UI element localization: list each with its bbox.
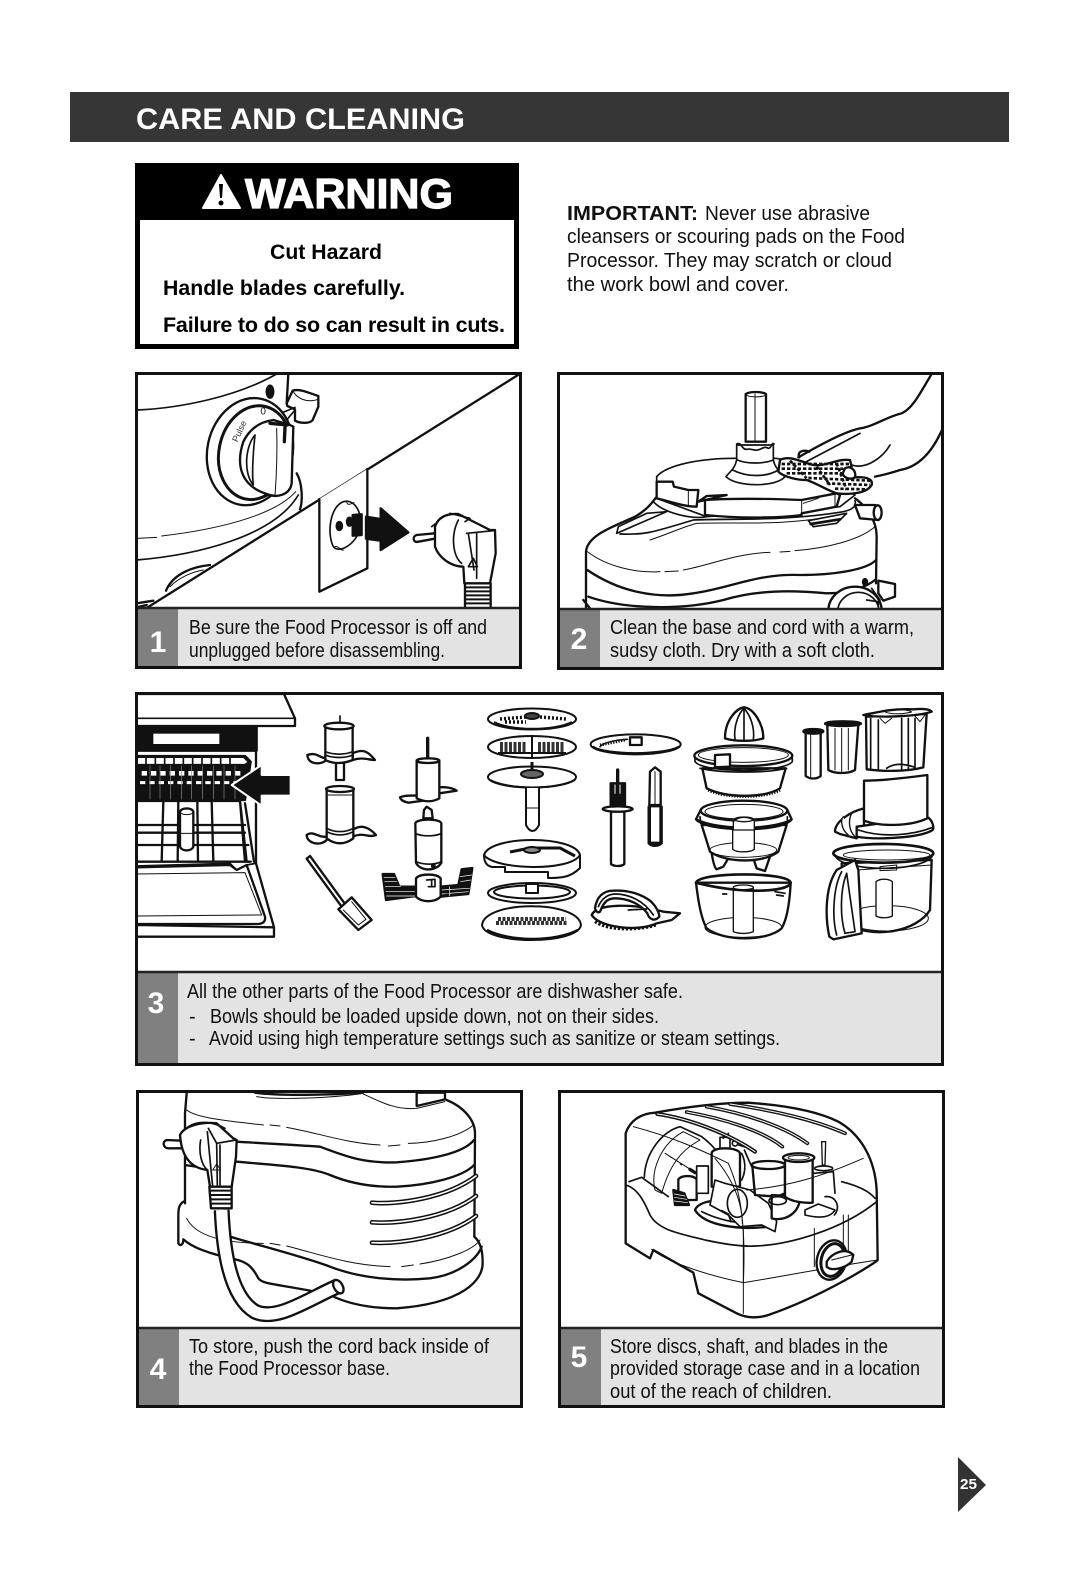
hazard name: Cut Hazard <box>270 240 382 264</box>
caption: step 1 <box>136 608 521 668</box>
important note: Processor. They may scratch or cloud <box>567 249 892 272</box>
caption: step 4 <box>136 1328 523 1406</box>
illustration: storage case <box>626 1103 878 1317</box>
illustration: citrus press bowls <box>694 707 792 938</box>
header bar <box>70 92 1009 142</box>
caption: step 3: Avoid using high temperature settings such as sanitize or steam settings. <box>209 1028 780 1050</box>
caption: step 3: All the other parts of the Food Processor are dishwasher safe. <box>187 981 683 1003</box>
caption: step 3 <box>136 972 943 1064</box>
caption: step 5: provided storage case and in a location <box>610 1358 920 1380</box>
caption: step 2: Clean the base and cord with a warm, <box>610 617 914 639</box>
page number marker <box>958 1457 986 1512</box>
illustration: storing the cord <box>164 1093 483 1314</box>
caption: step 1: 1 <box>150 626 166 659</box>
caption: step 4: the Food Processor base. <box>189 1358 390 1380</box>
illustration: food pushers, feed tube lid and work bowl <box>803 709 933 939</box>
caption: step 5 <box>558 1328 945 1406</box>
instruction: Handle blades carefully. <box>163 276 405 300</box>
icon: warning triangle <box>203 175 240 208</box>
illustration: unplug the processor: 0 <box>260 406 266 417</box>
illustration: disc, pushers and lid handle <box>591 734 681 929</box>
consequence: Failure to do so can result in cuts. <box>163 313 505 337</box>
panel: step 5 <box>558 1092 945 1406</box>
caption: step 2: sudsy cloth. Dry with a soft cloth. <box>610 640 875 662</box>
caption: step 1: Be sure the Food Processor is off and <box>189 617 487 639</box>
important note: cleansers or scouring pads on the Food <box>567 225 905 248</box>
important note: the work bowl and cover. <box>567 273 789 296</box>
illustration: wiping the base with a cloth <box>582 375 941 608</box>
important note: Never use abrasive <box>705 202 870 225</box>
caption: step 5: Store discs, shaft, and blades in the <box>610 1336 888 1358</box>
caption: step 3: Bowls should be loaded upside down, not on their sides. <box>210 1006 659 1028</box>
caption: step 3: - <box>189 1006 196 1028</box>
illustration: unplug the processor: Pulse <box>230 419 249 444</box>
caption: step 1: unplugged before disassembling. <box>189 640 445 662</box>
caption: step 5: 5 <box>571 1341 587 1374</box>
caption: step 3: - <box>189 1028 196 1050</box>
caption: step 5: out of the reach of children. <box>610 1381 832 1403</box>
panel: step 2 <box>557 373 943 668</box>
page number marker: 25 <box>960 1476 977 1493</box>
panel: step 3 <box>136 694 943 1064</box>
caption: step 4: 4 <box>150 1353 167 1386</box>
illustration: blades, spatula and dough tool <box>307 716 472 930</box>
illustration: unplug the processor <box>137 373 522 609</box>
title: CARE AND CLEANING <box>136 103 465 136</box>
important note <box>567 202 905 296</box>
warning box <box>135 163 519 346</box>
caption: step 2 <box>557 609 943 668</box>
panel: step 4 <box>136 1092 523 1406</box>
caption: step 4: To store, push the cord back inside of <box>189 1336 489 1358</box>
caption: step 3: 3 <box>148 987 164 1020</box>
important note: IMPORTANT: <box>567 202 698 225</box>
illustration: open dishwasher <box>137 694 295 937</box>
caption: step 2: 2 <box>571 623 587 656</box>
panel: step 1 <box>136 373 522 668</box>
illustration: slicing and shredding discs <box>482 708 581 940</box>
warning heading: WARNING <box>245 170 453 217</box>
